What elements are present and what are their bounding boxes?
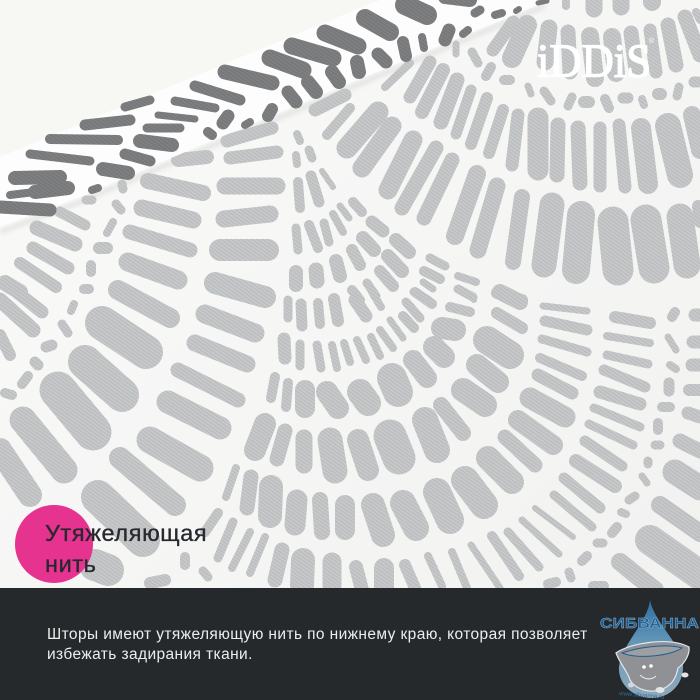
heading: weighted thread bbox=[45, 520, 207, 577]
iddis brand logo: iDDiS bbox=[537, 35, 651, 88]
heading: weighted thread: нить bbox=[45, 551, 97, 577]
footer description text: Шторы имеют утяжеляющую нить по нижнему краю, которая позволяет bbox=[47, 626, 588, 643]
iddis brand logo: ® bbox=[649, 37, 655, 45]
logo wordmark: СИБВАННА bbox=[600, 615, 699, 632]
icon: smiling bathtub bbox=[616, 642, 689, 693]
footer description text: избежать задирания ткани. bbox=[47, 646, 253, 663]
dark footer bar bbox=[0, 588, 700, 700]
footer description text bbox=[47, 626, 588, 663]
pink accent circle bbox=[15, 505, 93, 583]
heading: weighted thread: Утяжеляющая bbox=[45, 520, 207, 546]
icon: water drop bbox=[619, 600, 683, 698]
